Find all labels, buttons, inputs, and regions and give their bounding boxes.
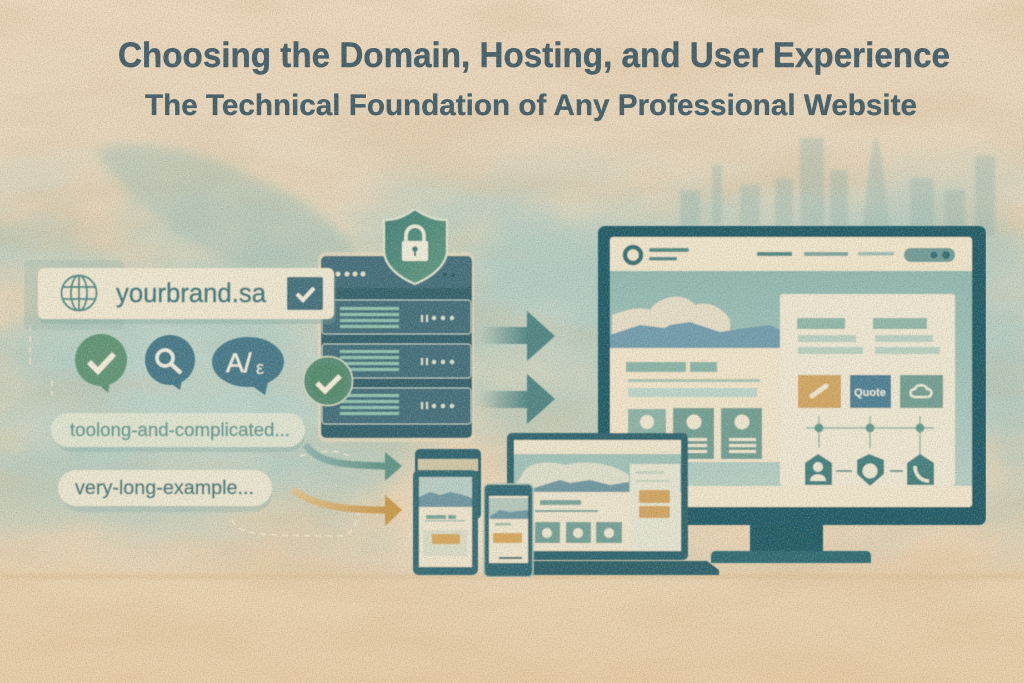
- icon: language bubble: A/: [226, 348, 252, 378]
- phone: [484, 484, 533, 577]
- icon: security shield with lock: [384, 209, 447, 284]
- monitor header: [625, 247, 955, 263]
- monitor hero image: [610, 271, 972, 486]
- pill: very long example: very-long-example...: [75, 478, 254, 499]
- pill: long domain example: toolong-and-complicated...: [70, 420, 290, 440]
- arrow: hosting to site bottom: [480, 374, 555, 424]
- title: Choosing the Domain, Hosting, and User Experience: [118, 36, 950, 75]
- server unit 2: [322, 344, 471, 378]
- dashed connectors: [30, 325, 360, 536]
- arrow: gold small: [292, 490, 402, 526]
- domain name: yourbrand.sa: [116, 278, 267, 308]
- icon: domain check box: [287, 277, 323, 310]
- laptop: [507, 433, 719, 575]
- subtitle: The Technical Foundation of Any Professional Website: [145, 89, 917, 122]
- arrow: hosting to site top: [480, 311, 555, 361]
- icon: phone: [907, 454, 934, 485]
- arrow: teal small: [305, 445, 402, 481]
- server stack: [318, 252, 474, 442]
- icon: green check bubble: [75, 334, 127, 393]
- tablet: [413, 449, 481, 575]
- icon: server check badge: [304, 356, 352, 406]
- button: cloud: [900, 375, 943, 408]
- button: quote: [850, 375, 891, 408]
- skyline: [680, 135, 995, 236]
- button: gold link: [798, 375, 841, 408]
- pill: very long example: [58, 470, 272, 512]
- laptop hero: [514, 454, 681, 492]
- title: [118, 36, 950, 122]
- icon: user: [805, 454, 832, 485]
- server unit 1: [322, 300, 471, 334]
- button: quote: Quote: [854, 387, 886, 399]
- icon: apple shield: [857, 454, 884, 486]
- domain bar: [24, 260, 336, 330]
- monitor side card: [780, 294, 955, 486]
- laptop tiles: [535, 522, 622, 543]
- server unit 3: [322, 388, 471, 424]
- icon: search bubble: [145, 335, 195, 390]
- illustration: [24, 209, 986, 577]
- desktop monitor: [598, 226, 986, 563]
- icon: language bubble: [212, 337, 284, 395]
- icon: language bubble: ε: [256, 358, 264, 378]
- pill: long domain example: [51, 413, 305, 452]
- icon: globe: [62, 276, 96, 310]
- flow connectors: [806, 416, 934, 458]
- laptop side panel: [630, 464, 680, 550]
- monitor lower content: [610, 348, 780, 462]
